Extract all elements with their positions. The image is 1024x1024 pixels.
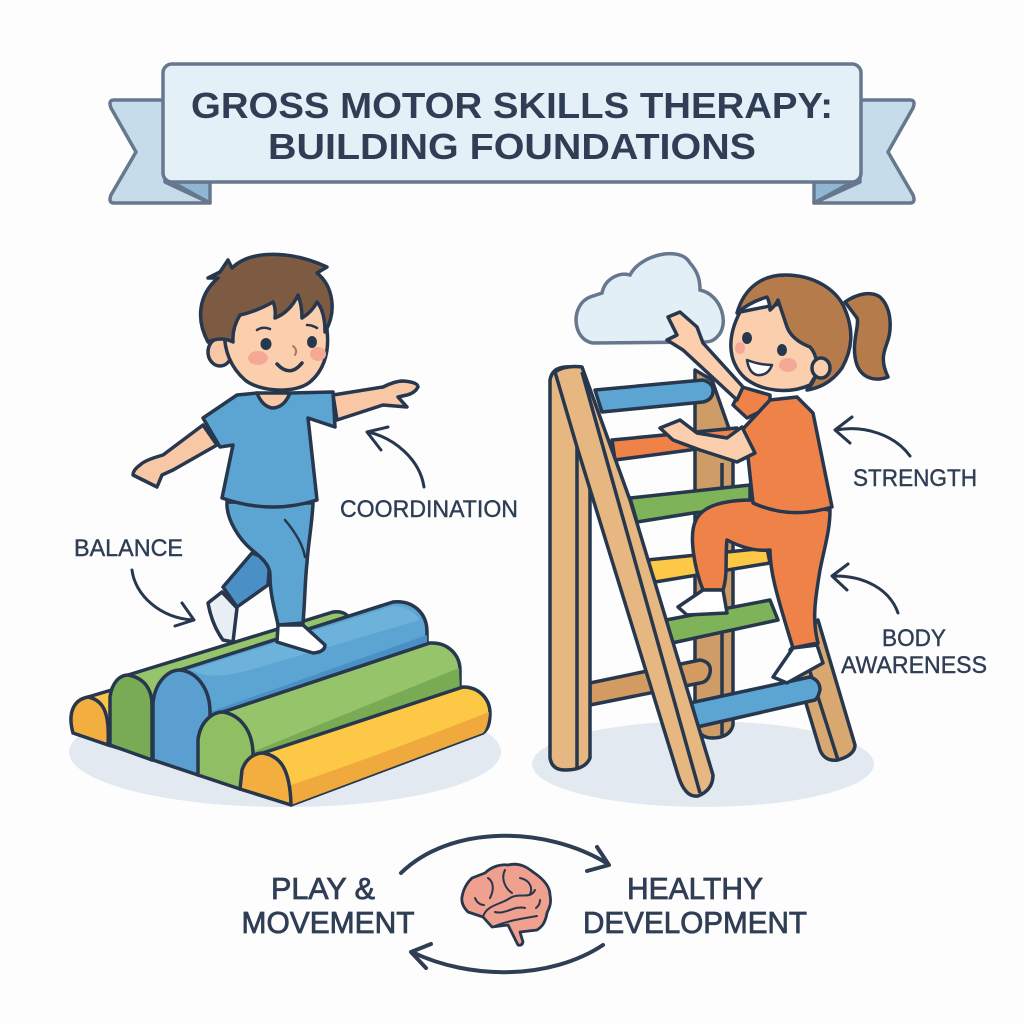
colored rungs — [595, 380, 820, 727]
title: GROSS MOTOR SKILLS THERAPY: — [191, 85, 833, 126]
label: balance: BALANCE — [74, 535, 183, 562]
text: healthy development: DEVELOPMENT — [583, 905, 807, 940]
boy front leg — [227, 502, 313, 625]
girl — [660, 275, 890, 683]
boy — [133, 254, 418, 653]
boy socks — [208, 592, 237, 642]
text: healthy development: HEALTHY — [627, 871, 763, 906]
girl raised arm — [667, 312, 743, 400]
girl eyes and smile — [742, 332, 752, 344]
left rail — [550, 367, 590, 770]
bottom cycle — [242, 836, 807, 972]
icon: brain — [462, 864, 551, 945]
cloud — [576, 254, 723, 343]
girl shirt — [742, 397, 832, 513]
banner panel — [163, 64, 861, 182]
girl head — [731, 300, 825, 390]
boy shirt — [203, 392, 335, 507]
girl sleeve back — [733, 387, 770, 418]
title — [191, 85, 833, 167]
girl legs — [692, 500, 830, 648]
label: body awareness: AWARENESS — [841, 652, 987, 679]
foam rollers — [71, 602, 490, 805]
cycle arrows — [401, 836, 609, 972]
back right rail — [790, 620, 855, 760]
girl hair — [737, 275, 851, 390]
label: body awareness — [841, 625, 987, 679]
text: play and movement: PLAY & — [271, 871, 375, 906]
text: play and movement: MOVEMENT — [242, 905, 415, 940]
floor shadows — [69, 697, 874, 807]
yellow front roller — [240, 687, 490, 805]
girl lower arm — [660, 420, 755, 462]
label: strength: STRENGTH — [853, 465, 977, 492]
arrow: balance — [132, 570, 194, 626]
text: play and movement — [242, 871, 415, 940]
girl socks — [678, 590, 727, 615]
yellow back roller — [71, 686, 125, 750]
arrow: coordination — [367, 427, 424, 487]
diagonal rail — [555, 367, 713, 796]
wood rung — [590, 660, 710, 705]
ladder — [550, 367, 855, 796]
title banner — [110, 64, 914, 203]
boy face — [224, 295, 328, 390]
boy ear — [208, 338, 232, 366]
green back roller — [110, 612, 350, 760]
banner ribbon right — [814, 100, 914, 203]
back centre rail — [695, 370, 733, 738]
title: BUILDING FOUNDATIONS — [268, 126, 756, 167]
text: healthy development — [583, 871, 807, 940]
boy eyes and smile — [260, 338, 272, 350]
label: body awareness: BODY — [882, 625, 946, 652]
labels — [74, 465, 987, 679]
arrow: body awareness — [832, 564, 898, 613]
boy arms — [133, 425, 217, 487]
boy back leg — [223, 553, 270, 607]
boy hair — [201, 254, 332, 342]
arrow: strength — [835, 417, 910, 456]
boy collar — [257, 393, 290, 408]
banner ribbon left — [110, 100, 210, 203]
annotation arrows — [132, 417, 910, 626]
label: coordination: COORDINATION — [340, 496, 518, 523]
green front roller — [198, 643, 460, 789]
girl ponytail — [845, 294, 890, 379]
blue middle roller — [153, 602, 427, 775]
girl ear — [812, 358, 830, 378]
